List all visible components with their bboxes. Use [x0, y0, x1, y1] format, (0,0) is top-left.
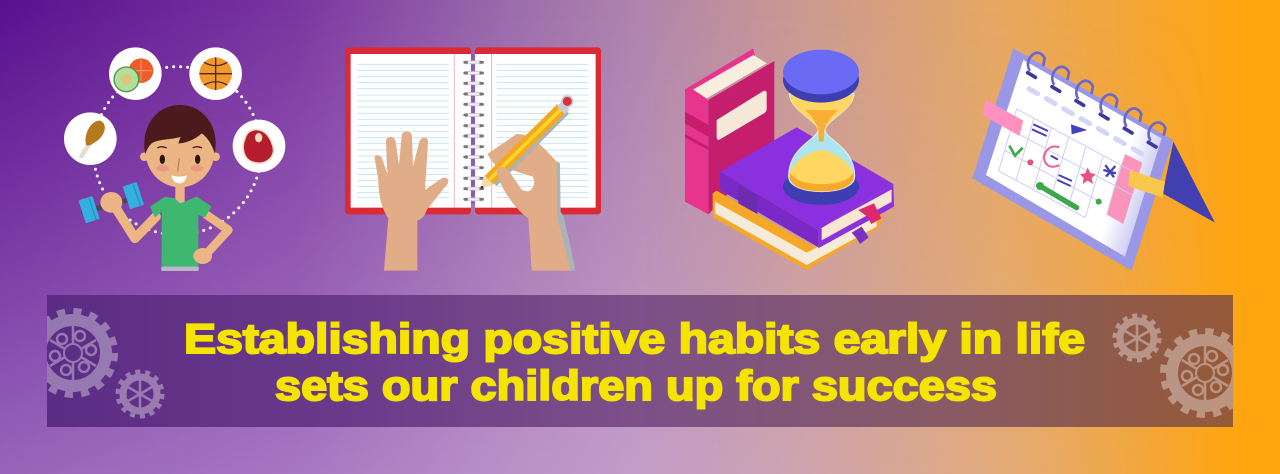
- calendar grid: [999, 109, 1138, 218]
- gear: small left: [118, 372, 162, 416]
- grey waistband: [161, 267, 199, 271]
- right hand shadow: [553, 161, 576, 271]
- icon: dumbbell: [78, 182, 144, 223]
- illustration: notebook with hands and pencil: [345, 47, 601, 271]
- calendar base: [972, 48, 1173, 271]
- thumb over pencil: [496, 167, 522, 194]
- headline line 1: Establishing positive habits early in life: [184, 315, 1085, 362]
- head: [140, 105, 220, 187]
- spiral rings: [465, 62, 483, 199]
- headline line 2: sets our children up for success: [275, 362, 997, 409]
- hand on hip: [193, 248, 212, 264]
- right hand: [487, 134, 571, 271]
- hourglass: [783, 50, 859, 205]
- spine: [471, 54, 475, 204]
- date header dashes: [1029, 89, 1142, 154]
- arm holding dumbbell: [115, 207, 156, 238]
- neck: [175, 183, 185, 203]
- icon: vegetables: [109, 47, 162, 100]
- pink highlighted column: [1107, 154, 1142, 224]
- calendar stand: [1163, 142, 1215, 223]
- icon: meat steak: [233, 120, 285, 172]
- illustration: desk calendar: [972, 48, 1215, 271]
- banner: [32, 295, 1246, 427]
- calendar page: [986, 60, 1162, 257]
- right page: [475, 54, 596, 208]
- red left cover: [345, 47, 471, 214]
- icon: basketball: [189, 47, 242, 100]
- gear: large left: [32, 312, 114, 394]
- pink upright book: [685, 48, 774, 214]
- left page: [351, 54, 471, 208]
- dotted orbit ring: [93, 67, 261, 235]
- purple book: [720, 127, 894, 248]
- icon: chicken drumstick: [64, 112, 117, 165]
- banner gears: [32, 312, 1246, 416]
- gear: large right: [1164, 332, 1246, 414]
- hand on dumbbell: [100, 192, 122, 213]
- pink tape: [983, 100, 1023, 136]
- green shirt: [150, 197, 212, 267]
- illustration: books and hourglass: [685, 48, 894, 270]
- red right cover: [475, 47, 601, 214]
- spiral binding rings: [1028, 53, 1165, 147]
- pencil: [481, 96, 573, 189]
- arm on hip: [204, 215, 228, 257]
- left hand: [375, 131, 448, 271]
- headline: [184, 315, 1085, 409]
- bookmarks: [852, 203, 881, 244]
- illustration: boy with healthy habits: [64, 47, 285, 271]
- banner background: [47, 295, 1233, 427]
- yellow tape: [1128, 170, 1165, 198]
- calendar marks: [1009, 124, 1116, 208]
- gear: small right: [1115, 316, 1159, 360]
- orange book: [713, 191, 883, 270]
